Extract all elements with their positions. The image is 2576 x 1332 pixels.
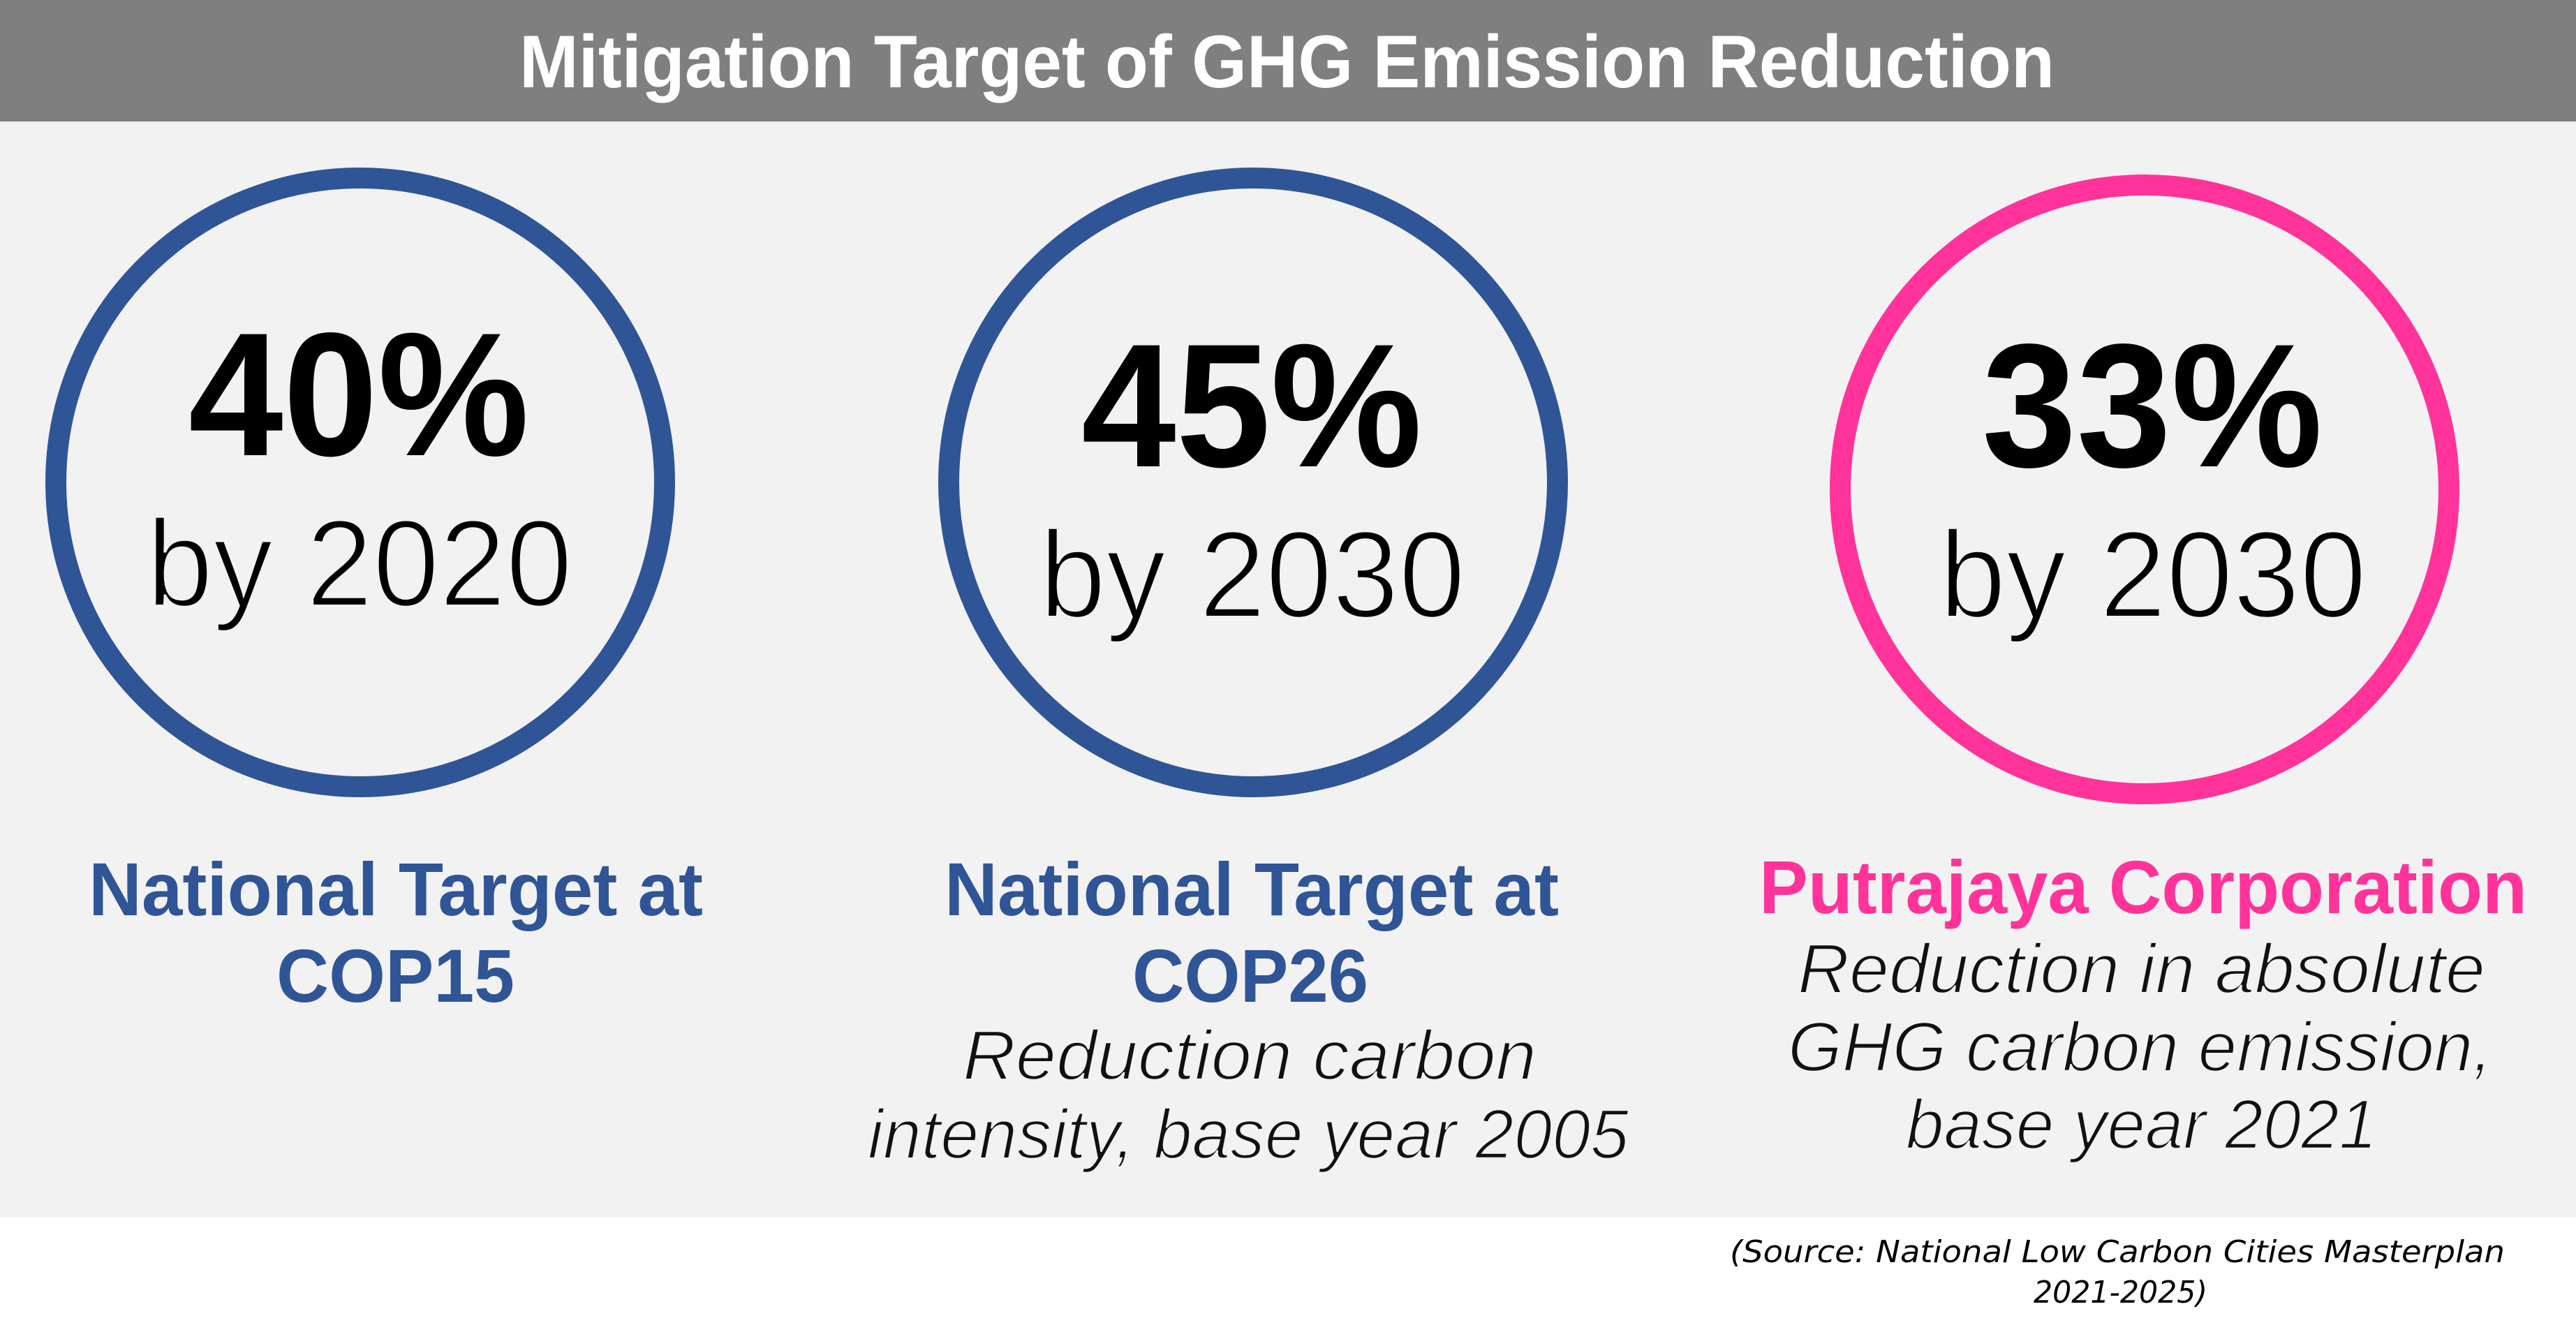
text: by 2020: by 2020: [147, 494, 572, 632]
heading: National Target at COP26: National Target at: [945, 847, 1559, 931]
source note: 2021-2025): [2034, 1275, 2207, 1310]
heading: National Target at COP15: [89, 847, 703, 1018]
stat: 33%: 33%: [1982, 308, 2323, 504]
description: reduction carbon intensity: Reduction carbon: [963, 1016, 1537, 1095]
description: reduction in absolute GHG: GHG carbon emission,: [1788, 1008, 2492, 1086]
heading: National Target at COP26: COP26: [1132, 933, 1368, 1018]
heading: Putrajaya Corporation: Putrajaya Corporation: [1759, 845, 2527, 929]
text: by 2030: by 2030: [1939, 505, 2367, 644]
stat: 45%: 45%: [1081, 308, 1422, 504]
circle ring: Putrajaya: [1840, 185, 2449, 794]
title: Mitigation Target of GHG Emission Reduction: [519, 20, 2055, 103]
stat: 40%: 40%: [188, 297, 529, 493]
circle ring: COP26: [949, 178, 1557, 787]
text: by 2030: by 2030: [1039, 505, 1465, 644]
description: reduction in absolute GHG: base year 2021: [1906, 1086, 2377, 1164]
description: reduction carbon intensity: [868, 1016, 1629, 1174]
panel: Putrajaya Corporation: [1759, 185, 2527, 1164]
circle ring: COP15: [56, 178, 665, 787]
description: reduction carbon intensity: intensity, base year 2005: [868, 1095, 1629, 1174]
panel: national target COP15: [56, 178, 703, 1018]
panel: national target COP26: [868, 178, 1629, 1174]
source note: [1730, 1234, 2505, 1310]
heading: National Target at COP15: National Target at: [89, 847, 703, 931]
heading: National Target at COP15: COP15: [276, 933, 515, 1018]
header bar: [0, 0, 2576, 121]
source note: (Source: National Low Carbon Cities Masterplan: [1730, 1234, 2505, 1270]
description: reduction in absolute GHG: Reduction in absolute: [1798, 930, 2485, 1008]
description: reduction in absolute GHG: [1788, 930, 2492, 1164]
heading: National Target at COP26: [945, 847, 1559, 1018]
